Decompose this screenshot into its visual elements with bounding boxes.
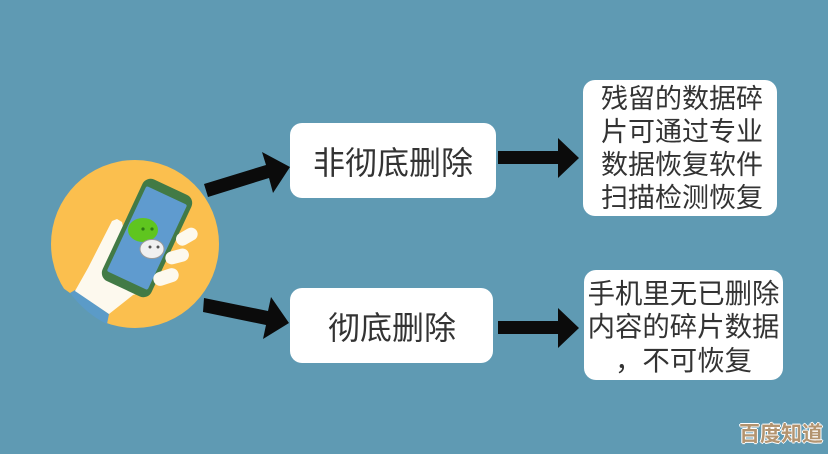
arrow: phone to not fully deleted — [204, 152, 290, 197]
arrow: fully deleted to unrecoverable — [498, 308, 579, 348]
box: not fully deleted — [290, 123, 496, 198]
box: unrecoverable result: 手机里无已删除 — [588, 278, 779, 309]
box: unrecoverable result — [584, 270, 783, 380]
arrow: phone to fully deleted — [203, 297, 289, 339]
box: fully deleted — [290, 288, 493, 363]
box: unrecoverable result: 内容的碎片数据 — [588, 311, 779, 342]
box: unrecoverable result: ，不可恢复 — [615, 345, 752, 376]
box: recoverable result — [583, 80, 777, 216]
box: not fully deleted: 非彻底删除 — [313, 144, 473, 180]
icon: hand holding phone — [51, 160, 219, 336]
watermark: 百度知道 — [739, 423, 823, 446]
box: recoverable result: 片可通过专业 — [601, 116, 763, 146]
box: recoverable result: 数据恢复软件 — [601, 150, 763, 180]
box: recoverable result: 残留的数据碎 — [601, 84, 763, 114]
box: recoverable result: 扫描检测恢复 — [601, 182, 763, 212]
arrow: not fully deleted to recoverable — [498, 138, 579, 178]
box: fully deleted: 彻底删除 — [328, 310, 456, 346]
